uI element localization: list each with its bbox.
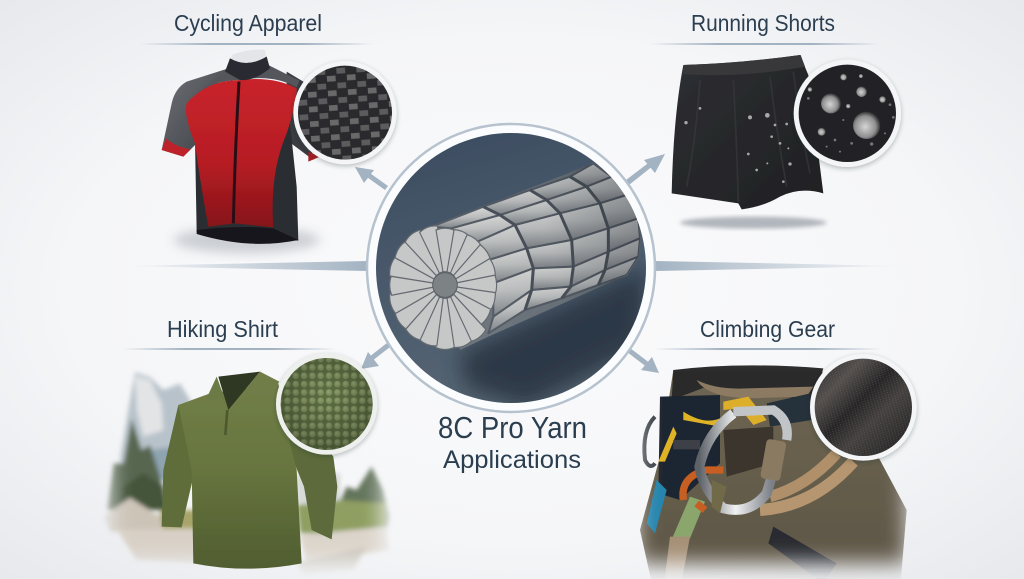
swatch ring: main yarn circle	[367, 124, 655, 412]
yarn end face petals	[388, 224, 497, 350]
water droplets on shorts	[684, 107, 792, 183]
divider lines	[122, 43, 882, 350]
title: hiking shirt: Hiking Shirt	[167, 316, 279, 342]
swatch: waffle knit	[276, 353, 377, 455]
arrow: to hiking shirt	[361, 343, 390, 369]
swatch: dark fabric	[810, 354, 917, 461]
title: climbing gear: Climbing Gear	[700, 316, 835, 342]
heading: 8C Pro Yarn Applications: 8C Pro Yarn	[438, 410, 587, 445]
pointer: right horizontal	[655, 261, 905, 271]
arrow: to climbing gear	[627, 348, 659, 373]
title: running shorts: Running Shorts	[691, 10, 835, 36]
arrow: to running shorts	[626, 154, 665, 185]
scene: mountains and trees	[103, 372, 390, 575]
panel: cycling jersey	[162, 50, 397, 253]
arrow: to cycling apparel	[355, 167, 388, 190]
yarn binding bands	[483, 177, 608, 310]
panel: hiking shirt	[103, 353, 390, 575]
panel: running shorts	[672, 55, 901, 229]
pointer: left horizontal	[120, 261, 367, 271]
heading: 8C Pro Yarn Applications	[438, 410, 587, 474]
heading: 8C Pro Yarn Applications: Applications	[443, 446, 581, 474]
panel: climbing gear	[640, 354, 917, 579]
swatch: water droplets	[794, 60, 901, 167]
title: cycling apparel: Cycling Apparel	[174, 10, 322, 36]
swatch: knit check texture	[293, 61, 397, 164]
yarn body dark base	[432, 163, 640, 350]
yarn segmented filaments	[432, 163, 640, 333]
illustration: 8C yarn macro	[373, 130, 650, 407]
